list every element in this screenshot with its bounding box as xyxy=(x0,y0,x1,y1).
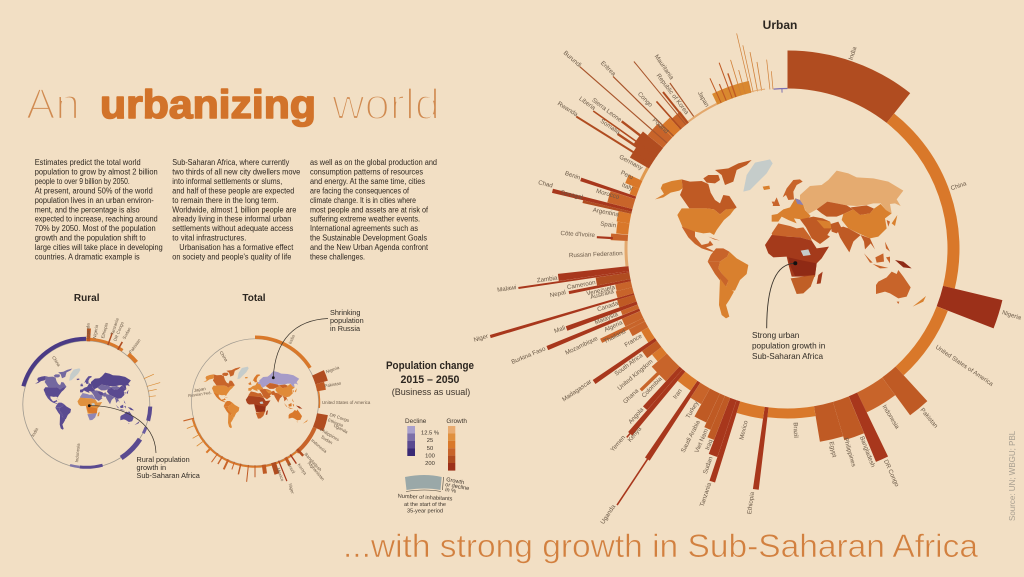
labels: rural countries: China xyxy=(51,355,62,368)
column 2: already living in these informal urban xyxy=(172,215,291,224)
labels: total countries: Ethiopia xyxy=(327,417,344,428)
map: rural growth world map xyxy=(35,368,140,430)
callout: rural growth in Sub-Saharan Africa: Rural population xyxy=(136,455,190,464)
column 1: ment, and the percentage is also xyxy=(35,205,140,214)
callout: urban growth in Sub-Saharan Africa: Sub-Saharan Africa xyxy=(752,352,823,361)
legend heading: (Business as usual) xyxy=(392,387,470,397)
labels: total countries: China xyxy=(219,350,229,363)
column 3 xyxy=(310,158,437,262)
heading: Total: Total xyxy=(242,293,266,304)
labels: total countries: Bangladesh xyxy=(303,452,323,473)
labels: total countries: Pakistan xyxy=(324,381,342,388)
labels: rural countries: Uganda xyxy=(86,323,90,339)
callout: urban growth in Sub-Saharan Africa: population growth in xyxy=(752,342,826,350)
labels: urban countries: Rwanda xyxy=(556,100,579,119)
labels: urban countries: Nepal xyxy=(549,289,567,299)
labels: total countries: Japan xyxy=(193,386,207,393)
column 2: and half of these people are expected xyxy=(172,186,294,195)
title: world xyxy=(331,80,440,129)
heading: Urban: Urban xyxy=(763,18,797,32)
labels: rural countries: India xyxy=(30,426,40,438)
legend: scale values: 50 xyxy=(427,446,433,452)
labels: urban countries: Niger xyxy=(473,333,489,344)
labels: urban countries: Benin xyxy=(564,170,582,182)
column 1: population to grow by almost 2 billion xyxy=(35,168,158,176)
chart: total radial bars xyxy=(163,310,347,495)
labels: urban countries: Kenya xyxy=(627,425,643,444)
labels: rural countries: Pakistan xyxy=(128,337,142,354)
source note: Source: UN; WBGU; PBL xyxy=(1008,430,1017,521)
column 2: Sub-Saharan Africa, where currently xyxy=(172,158,289,167)
legend: sector key xyxy=(398,475,470,514)
labels: urban countries: Mauritania xyxy=(653,53,675,82)
bar: India total xyxy=(190,337,320,467)
labels: urban countries: Russian Federation xyxy=(569,250,623,259)
column 3: climate change. It is in cities where xyxy=(310,196,416,205)
labels: total countries: Sudan xyxy=(320,434,334,446)
labels: urban countries: Egypt xyxy=(827,441,838,458)
labels: urban countries: Italy xyxy=(621,182,635,193)
labels: urban countries: Côte d'Ivoire xyxy=(560,230,596,239)
labels: urban countries: Republic of Korea xyxy=(655,72,690,116)
labels: rural countries: Tanzania xyxy=(109,317,120,336)
labels: urban countries: Germany xyxy=(618,154,644,172)
labels: urban countries: India xyxy=(848,45,859,61)
legend: sector key: Number of inhabitants xyxy=(398,494,453,502)
labels: urban countries: Burundi xyxy=(562,50,582,69)
column 1: Estimates predict the total world xyxy=(35,158,141,167)
column 2: to remain there in the long term. xyxy=(172,196,278,205)
legend heading: 2015 – 2050 xyxy=(401,374,460,386)
labels: urban countries: South Africa xyxy=(613,352,645,378)
legend: decline scale xyxy=(405,418,427,456)
map: urban growth world map xyxy=(655,159,926,318)
column 3: consumption patterns of resources xyxy=(310,168,423,176)
labels: urban countries: Mali xyxy=(553,325,566,335)
column 2: two thirds of all new city dwellers move xyxy=(172,168,301,176)
labels: urban countries: Burkina Faso xyxy=(510,345,547,366)
labels: urban countries: Tanzania xyxy=(699,481,713,508)
labels: urban countries: Viet Nam xyxy=(694,428,710,454)
legend heading xyxy=(386,360,474,397)
labels: total countries: Philippines xyxy=(319,427,341,443)
labels: urban countries: Mozambique xyxy=(564,335,600,357)
column 2: Urbanisation has a formative effect xyxy=(179,243,294,252)
text block: introduction xyxy=(35,158,437,262)
labels: total countries: Uganda xyxy=(333,423,349,435)
callout: rural growth in Sub-Saharan Africa: growth in xyxy=(136,463,166,472)
legend heading: Population change xyxy=(386,360,474,372)
column 1: population lives in an urban environ- xyxy=(35,196,154,205)
column 1: growth and the population shift to xyxy=(35,234,146,243)
legend: growth scale xyxy=(446,418,467,471)
labels: total countries: United States of America xyxy=(322,400,371,405)
column 1: large cities will take place in developing xyxy=(35,243,163,252)
labels: total countries: Nigeria xyxy=(325,365,340,374)
title: urbanizing xyxy=(100,83,316,127)
labels: total countries: Afghanistan xyxy=(307,461,326,482)
labels: urban countries: Iran xyxy=(672,387,684,401)
title xyxy=(26,80,440,129)
labels: urban countries: Australia xyxy=(590,288,615,301)
labels: urban countries: Nigeria xyxy=(1001,309,1022,322)
callout: urban growth in Sub-Saharan Africa: Strong urban xyxy=(752,331,800,340)
labels: urban countries: Sierra Leone xyxy=(590,97,623,124)
legend: scale values: 100 xyxy=(425,454,435,460)
labels: urban countries: Eritrea xyxy=(599,60,617,78)
column 3: these challenges. xyxy=(310,252,365,262)
labels: rural countries: Sudan xyxy=(121,326,132,340)
labels: total countries: DR Congo xyxy=(329,412,351,423)
column 2 xyxy=(172,158,301,262)
callout: rural growth in Sub-Saharan Africa: Sub-Saharan Africa xyxy=(136,471,201,480)
labels: urban countries: Mexico xyxy=(738,419,750,441)
labels: urban countries: Liberia xyxy=(577,95,597,112)
labels: total countries: Kenya xyxy=(297,463,308,476)
labels: urban countries: Zambia xyxy=(536,275,558,284)
legend: scale values: 200 xyxy=(425,461,435,467)
bar: India rural decline xyxy=(5,323,167,485)
labels: urban countries: Congo xyxy=(636,91,654,109)
labels: urban countries: Turkey xyxy=(685,399,701,420)
labels: rural countries: Ethiopia xyxy=(100,322,109,339)
legend: sector key: at the start of the xyxy=(404,502,446,508)
closing headline: ...with strong growth in Sub-Saharan Africa xyxy=(343,528,978,564)
labels: urban countries: Algeria xyxy=(603,319,624,334)
labels: urban countries: Madagascar xyxy=(561,378,593,403)
labels: urban countries: Spain xyxy=(600,221,617,229)
callout: shrinking population in Russia: population xyxy=(330,316,364,325)
callout: shrinking population in Russia: in Russia xyxy=(330,324,361,333)
labels: urban countries: France xyxy=(623,333,644,349)
legend: population change xyxy=(386,360,474,514)
legend: scale values xyxy=(421,430,439,467)
labels: urban countries: China xyxy=(950,180,968,192)
callout: shrinking population in Russia: Shrinking xyxy=(330,308,360,317)
labels: urban countries: Brazil xyxy=(792,422,799,438)
labels: urban countries xyxy=(473,45,1022,526)
column 1: At present, around 50% of the world xyxy=(35,186,153,195)
legend: scale values: 25 xyxy=(427,438,433,444)
labels: urban countries: Uganda xyxy=(599,503,617,526)
column 3: are facing the consequences of xyxy=(310,186,410,195)
labels: urban countries: Argentina xyxy=(592,207,620,219)
map: total growth world map xyxy=(203,367,308,428)
labels: urban countries: Senegal xyxy=(560,189,583,201)
labels: total countries: Brazil xyxy=(286,462,296,474)
labels: total countries: Indonesia xyxy=(310,438,328,454)
chart: rural radial bars xyxy=(0,312,179,497)
column 2: Worldwide, almost 1 billion people are xyxy=(172,205,297,214)
labels: urban countries: United Kingdom xyxy=(616,358,654,392)
chart: urban radial bars xyxy=(495,0,1024,541)
column 3: International agreements such as xyxy=(310,224,418,233)
labels: urban countries: Bangladesh xyxy=(858,435,876,469)
column 1: countries. A dramatic example is xyxy=(35,252,140,262)
column 1: 70% by 2050. Most of the population xyxy=(35,224,156,233)
legend: sector key: 35-year period xyxy=(407,508,443,514)
column 2: into informal settlements or slums, xyxy=(172,177,282,186)
labels: urban countries: Ghana xyxy=(622,387,641,405)
labels: urban countries: Venezuela xyxy=(586,284,616,297)
labels: urban countries: Yemen xyxy=(609,434,627,453)
column 3: the Sustainable Development Goals xyxy=(310,234,427,243)
legend: scale values: 12.5 % xyxy=(421,430,439,436)
legend: sector key: or decline xyxy=(445,482,470,492)
labels: urban countries: Somalia xyxy=(599,118,622,136)
labels: total countries: Russian Fed. xyxy=(188,390,212,398)
labels: urban countries: Japan xyxy=(696,90,711,109)
callout: urban growth in Sub-Saharan Africa xyxy=(752,261,826,361)
labels: urban countries: Angola xyxy=(627,406,646,426)
column 2: settlements without adequate access xyxy=(172,224,293,233)
labels: urban countries: Ethiopia xyxy=(746,491,756,515)
labels: urban countries: Poland xyxy=(651,117,670,136)
labels: urban countries: Chad xyxy=(537,179,554,190)
bar: India xyxy=(608,70,966,428)
legend: sector key: Growth xyxy=(446,477,464,486)
title: An xyxy=(26,80,80,129)
labels: rural countries: DR Congo xyxy=(112,320,125,342)
labels: urban countries: Malaysia xyxy=(594,311,620,326)
labels: total countries xyxy=(188,334,371,495)
heading: Rural: Rural xyxy=(74,293,100,304)
labels: urban countries: Philippines xyxy=(842,437,857,468)
column 3: and the New Urban Agenda confront xyxy=(310,243,429,252)
column 2: to vital infrastructures. xyxy=(172,234,246,243)
labels: urban countries: Saudi Arabia xyxy=(680,419,702,454)
labels: total countries: Niger xyxy=(288,483,295,495)
labels: urban countries: United States of America xyxy=(934,344,995,388)
labels: urban countries: Sudan xyxy=(702,455,715,475)
column 3: and energy. At the same time, cities xyxy=(310,177,425,186)
column 1: expected to increase, reaching around xyxy=(35,215,158,224)
column 3: as well as on the global production and xyxy=(310,158,437,167)
legend: growth scale: Growth xyxy=(446,418,467,425)
labels: total countries: Mexico xyxy=(276,467,285,482)
column 2: on society and people's quality of life xyxy=(172,252,292,262)
labels: urban countries: Cameroon xyxy=(566,279,597,291)
labels: rural countries xyxy=(30,317,142,463)
callout: rural growth in Sub-Saharan Africa xyxy=(88,404,201,480)
labels: urban countries: Malawi xyxy=(497,284,517,294)
legend: sector key: in % xyxy=(445,487,456,495)
labels: urban countries: DR Congo xyxy=(882,459,900,488)
column 3: suffering extreme weather events. xyxy=(310,215,420,224)
labels: urban countries: Indonesia xyxy=(881,404,901,431)
callout: shrinking population in Russia xyxy=(272,308,364,379)
labels: rural countries: Indonesia xyxy=(74,443,81,463)
legend: decline scale: Decline xyxy=(405,418,427,425)
labels: urban countries: Canada xyxy=(596,300,620,313)
labels: urban countries: Morocco xyxy=(595,188,621,201)
labels: total countries: India xyxy=(288,334,296,345)
labels: urban countries: Iraq xyxy=(704,438,715,451)
labels: urban countries: Peru xyxy=(619,169,635,181)
column 3: most people and assets are at risk of xyxy=(310,205,429,214)
labels: urban countries: Thailand xyxy=(603,328,627,345)
labels: rural countries: Nigeria xyxy=(92,324,99,339)
column 1 xyxy=(35,158,163,262)
column 1: people to over 9 billion by 2050. xyxy=(35,177,130,186)
labels: urban countries: Pakistan xyxy=(919,407,939,430)
labels: urban countries: Colombia xyxy=(641,375,664,399)
